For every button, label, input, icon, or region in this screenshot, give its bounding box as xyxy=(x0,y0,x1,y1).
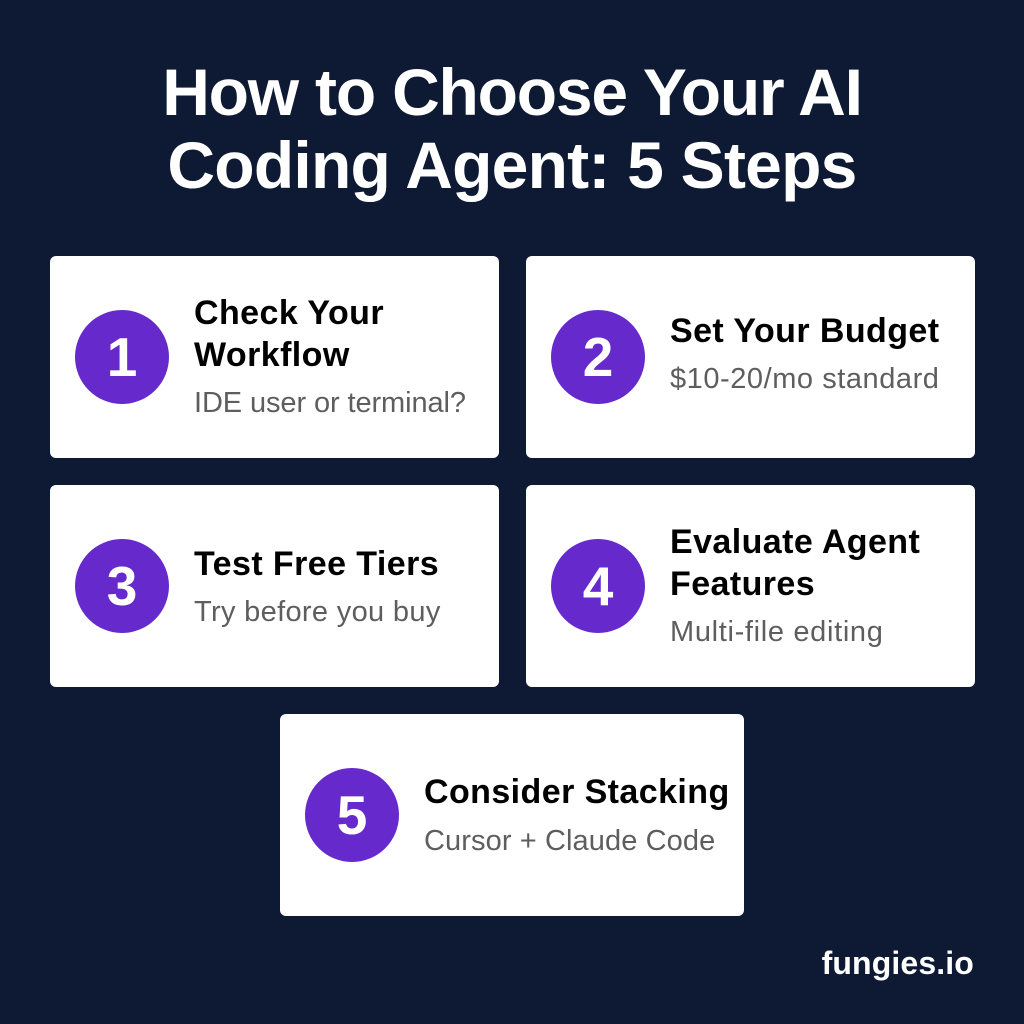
brand wordmark: fungies.io xyxy=(822,945,974,981)
step 1 description: IDE user or terminal? xyxy=(194,387,466,419)
step 3 number badge xyxy=(75,539,169,633)
step 4 description: Multi-file editing xyxy=(670,616,884,648)
step 4 heading xyxy=(670,523,920,603)
panel: step 2 xyxy=(526,256,975,458)
panel: step 4 xyxy=(526,485,975,687)
step 3 number badge: 3 xyxy=(107,555,137,617)
step 4 number badge: 4 xyxy=(583,555,613,617)
step 2 number badge: 2 xyxy=(583,326,613,388)
step 1 number badge xyxy=(75,310,169,404)
step 2 description: $10-20/mo standard xyxy=(670,363,939,395)
step 5 number badge xyxy=(305,768,399,862)
step 3 description: Try before you buy xyxy=(194,596,441,628)
step 1 heading: Workflow xyxy=(194,336,350,374)
step 5 description: Cursor + Claude Code xyxy=(424,825,715,857)
step 2 heading: Set Your Budget xyxy=(670,312,940,350)
step 2 number badge xyxy=(551,310,645,404)
step 5 heading: Consider Stacking xyxy=(424,773,730,811)
step 1 number badge: 1 xyxy=(107,326,137,388)
step 4 number badge xyxy=(551,539,645,633)
step 4 heading: Evaluate Agent xyxy=(670,523,920,561)
step 5 number badge: 5 xyxy=(337,784,367,846)
step 4 heading: Features xyxy=(670,565,815,603)
panel: step 5 xyxy=(280,714,744,916)
title xyxy=(162,55,862,202)
step 1 heading xyxy=(194,294,384,374)
step 1 heading: Check Your xyxy=(194,294,384,332)
title: How to Choose Your AI xyxy=(162,55,862,129)
title: Coding Agent: 5 Steps xyxy=(167,128,857,202)
panel: step 1 xyxy=(50,256,499,458)
step 3 heading: Test Free Tiers xyxy=(194,545,439,583)
panel: step 3 xyxy=(50,485,499,687)
